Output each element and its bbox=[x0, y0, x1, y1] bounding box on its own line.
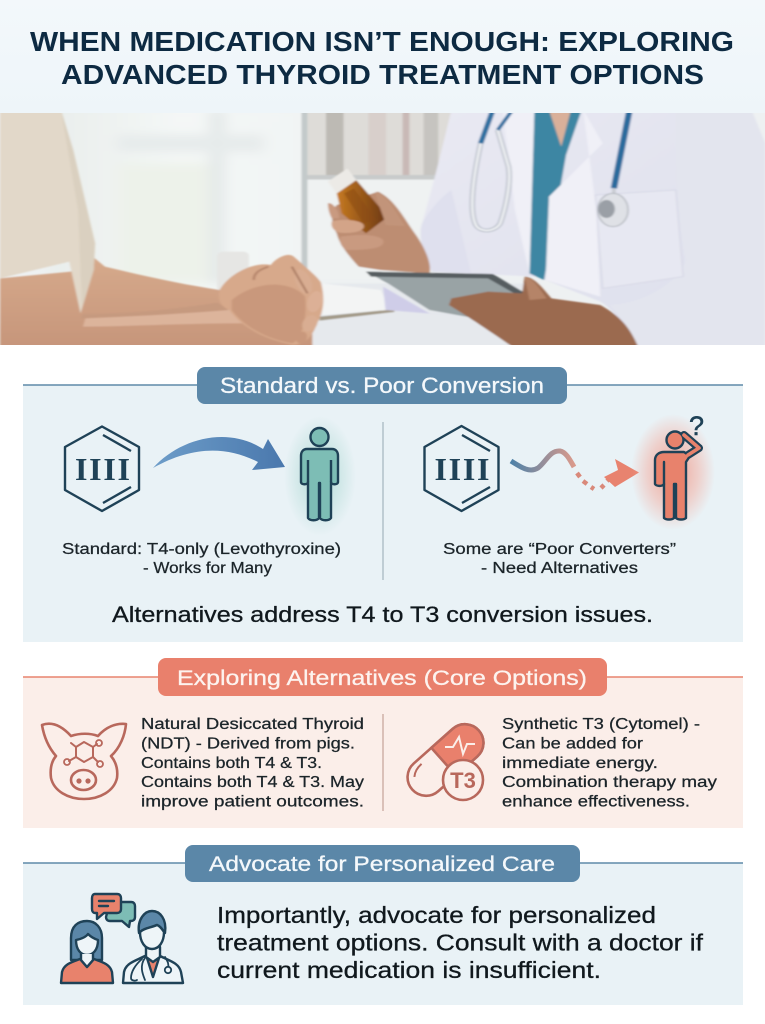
text: synthetic T3: enhance effectiveness. bbox=[502, 794, 690, 810]
heading pill: Advocate for Personalized Care bbox=[209, 853, 555, 876]
icon: T4 hexagon right: IIII bbox=[434, 451, 490, 487]
caption: poor converters bbox=[443, 541, 676, 577]
text: advocate message: current medication is insufficient. bbox=[217, 957, 601, 983]
text: NDT: Contains both T4 & T3. bbox=[141, 755, 322, 772]
panel: advocate for personalized care bbox=[23, 845, 743, 1005]
heading pill: Standard vs. Poor Conversion bbox=[220, 373, 544, 398]
caption: poor converters: - Need Alternatives bbox=[481, 560, 638, 577]
text: advocate message bbox=[217, 902, 704, 983]
heading pill bbox=[185, 845, 580, 882]
icon: T3 capsule bbox=[400, 717, 491, 803]
text: NDT: Natural Desiccated Thyroid bbox=[141, 716, 364, 733]
panel background bbox=[23, 385, 743, 642]
icon: T3 capsule: T3 bbox=[450, 768, 476, 793]
text: NDT bbox=[141, 716, 364, 810]
panel: standard vs poor conversion bbox=[23, 367, 743, 642]
heading pill bbox=[158, 658, 607, 696]
title: WHEN MEDICATION ISN’T ENOUGH: EXPLORING bbox=[30, 26, 734, 57]
title bbox=[30, 26, 734, 90]
text: advocate message: Importantly, advocate for personalized bbox=[217, 902, 656, 928]
panel: exploring alternatives bbox=[23, 658, 743, 828]
icon: T4 hexagon: IIII bbox=[75, 451, 130, 487]
scrubs bbox=[529, 110, 582, 280]
text: synthetic T3: Can be added for bbox=[502, 736, 643, 752]
icon: T4 hexagon right bbox=[424, 426, 498, 511]
icon: patient and doctor conversation bbox=[61, 894, 183, 983]
icon: healthy person bbox=[284, 416, 356, 536]
tablet bbox=[376, 276, 514, 318]
fingers around bottle bbox=[378, 206, 390, 220]
text: synthetic T3: Synthetic T3 (Cytomel) - bbox=[502, 716, 700, 733]
table bbox=[307, 283, 537, 350]
caption: poor converters: Some are “Poor Converters” bbox=[443, 541, 676, 558]
caption: standard: - Works for Many bbox=[143, 560, 272, 577]
title: ADVANCED THYROID TREATMENT OPTIONS bbox=[61, 59, 704, 90]
patient arm bbox=[0, 257, 312, 350]
text: advocate message: treatment options. Consult with a doctor if bbox=[217, 930, 704, 956]
doctor lower hand bbox=[449, 277, 639, 350]
photo: doctor showing a pill bottle to a patient bbox=[0, 103, 765, 357]
doctor upper hand bbox=[332, 192, 430, 273]
icon: T4 hexagon bbox=[65, 426, 139, 511]
arrow: poor conversion squiggle bbox=[511, 451, 639, 489]
text: NDT: improve patient outcomes. bbox=[141, 794, 364, 810]
stethoscope bbox=[472, 110, 630, 230]
icon: confused person bbox=[631, 411, 715, 530]
panel background bbox=[23, 677, 743, 828]
patient shirt bbox=[0, 113, 87, 313]
bottle bbox=[337, 180, 388, 233]
caption: standard bbox=[62, 541, 341, 577]
doctor coat bbox=[426, 113, 686, 322]
text: synthetic T3: Combination therapy may bbox=[502, 774, 717, 791]
heading pill bbox=[197, 367, 567, 404]
icon: confused person: ? bbox=[689, 411, 704, 441]
panel background bbox=[23, 863, 743, 1005]
text: NDT: Contains both T4 & T3. May bbox=[141, 774, 364, 791]
caption: standard: Standard: T4-only (Levothyroxine) bbox=[62, 541, 341, 558]
arrow: standard conversion bbox=[153, 437, 285, 470]
icon: pig with molecule bbox=[42, 724, 126, 799]
text: synthetic T3 bbox=[502, 716, 717, 810]
patient hands bbox=[219, 255, 323, 345]
summary text: Alternatives address T4 to T3 conversion issues. bbox=[112, 602, 653, 627]
lapels bbox=[503, 110, 534, 273]
heading pill: Exploring Alternatives (Core Options) bbox=[177, 667, 587, 690]
text: NDT: (NDT) - Derived from pigs. bbox=[141, 736, 355, 752]
text: synthetic T3: immediate energy. bbox=[502, 755, 658, 772]
header band bbox=[0, 0, 765, 113]
